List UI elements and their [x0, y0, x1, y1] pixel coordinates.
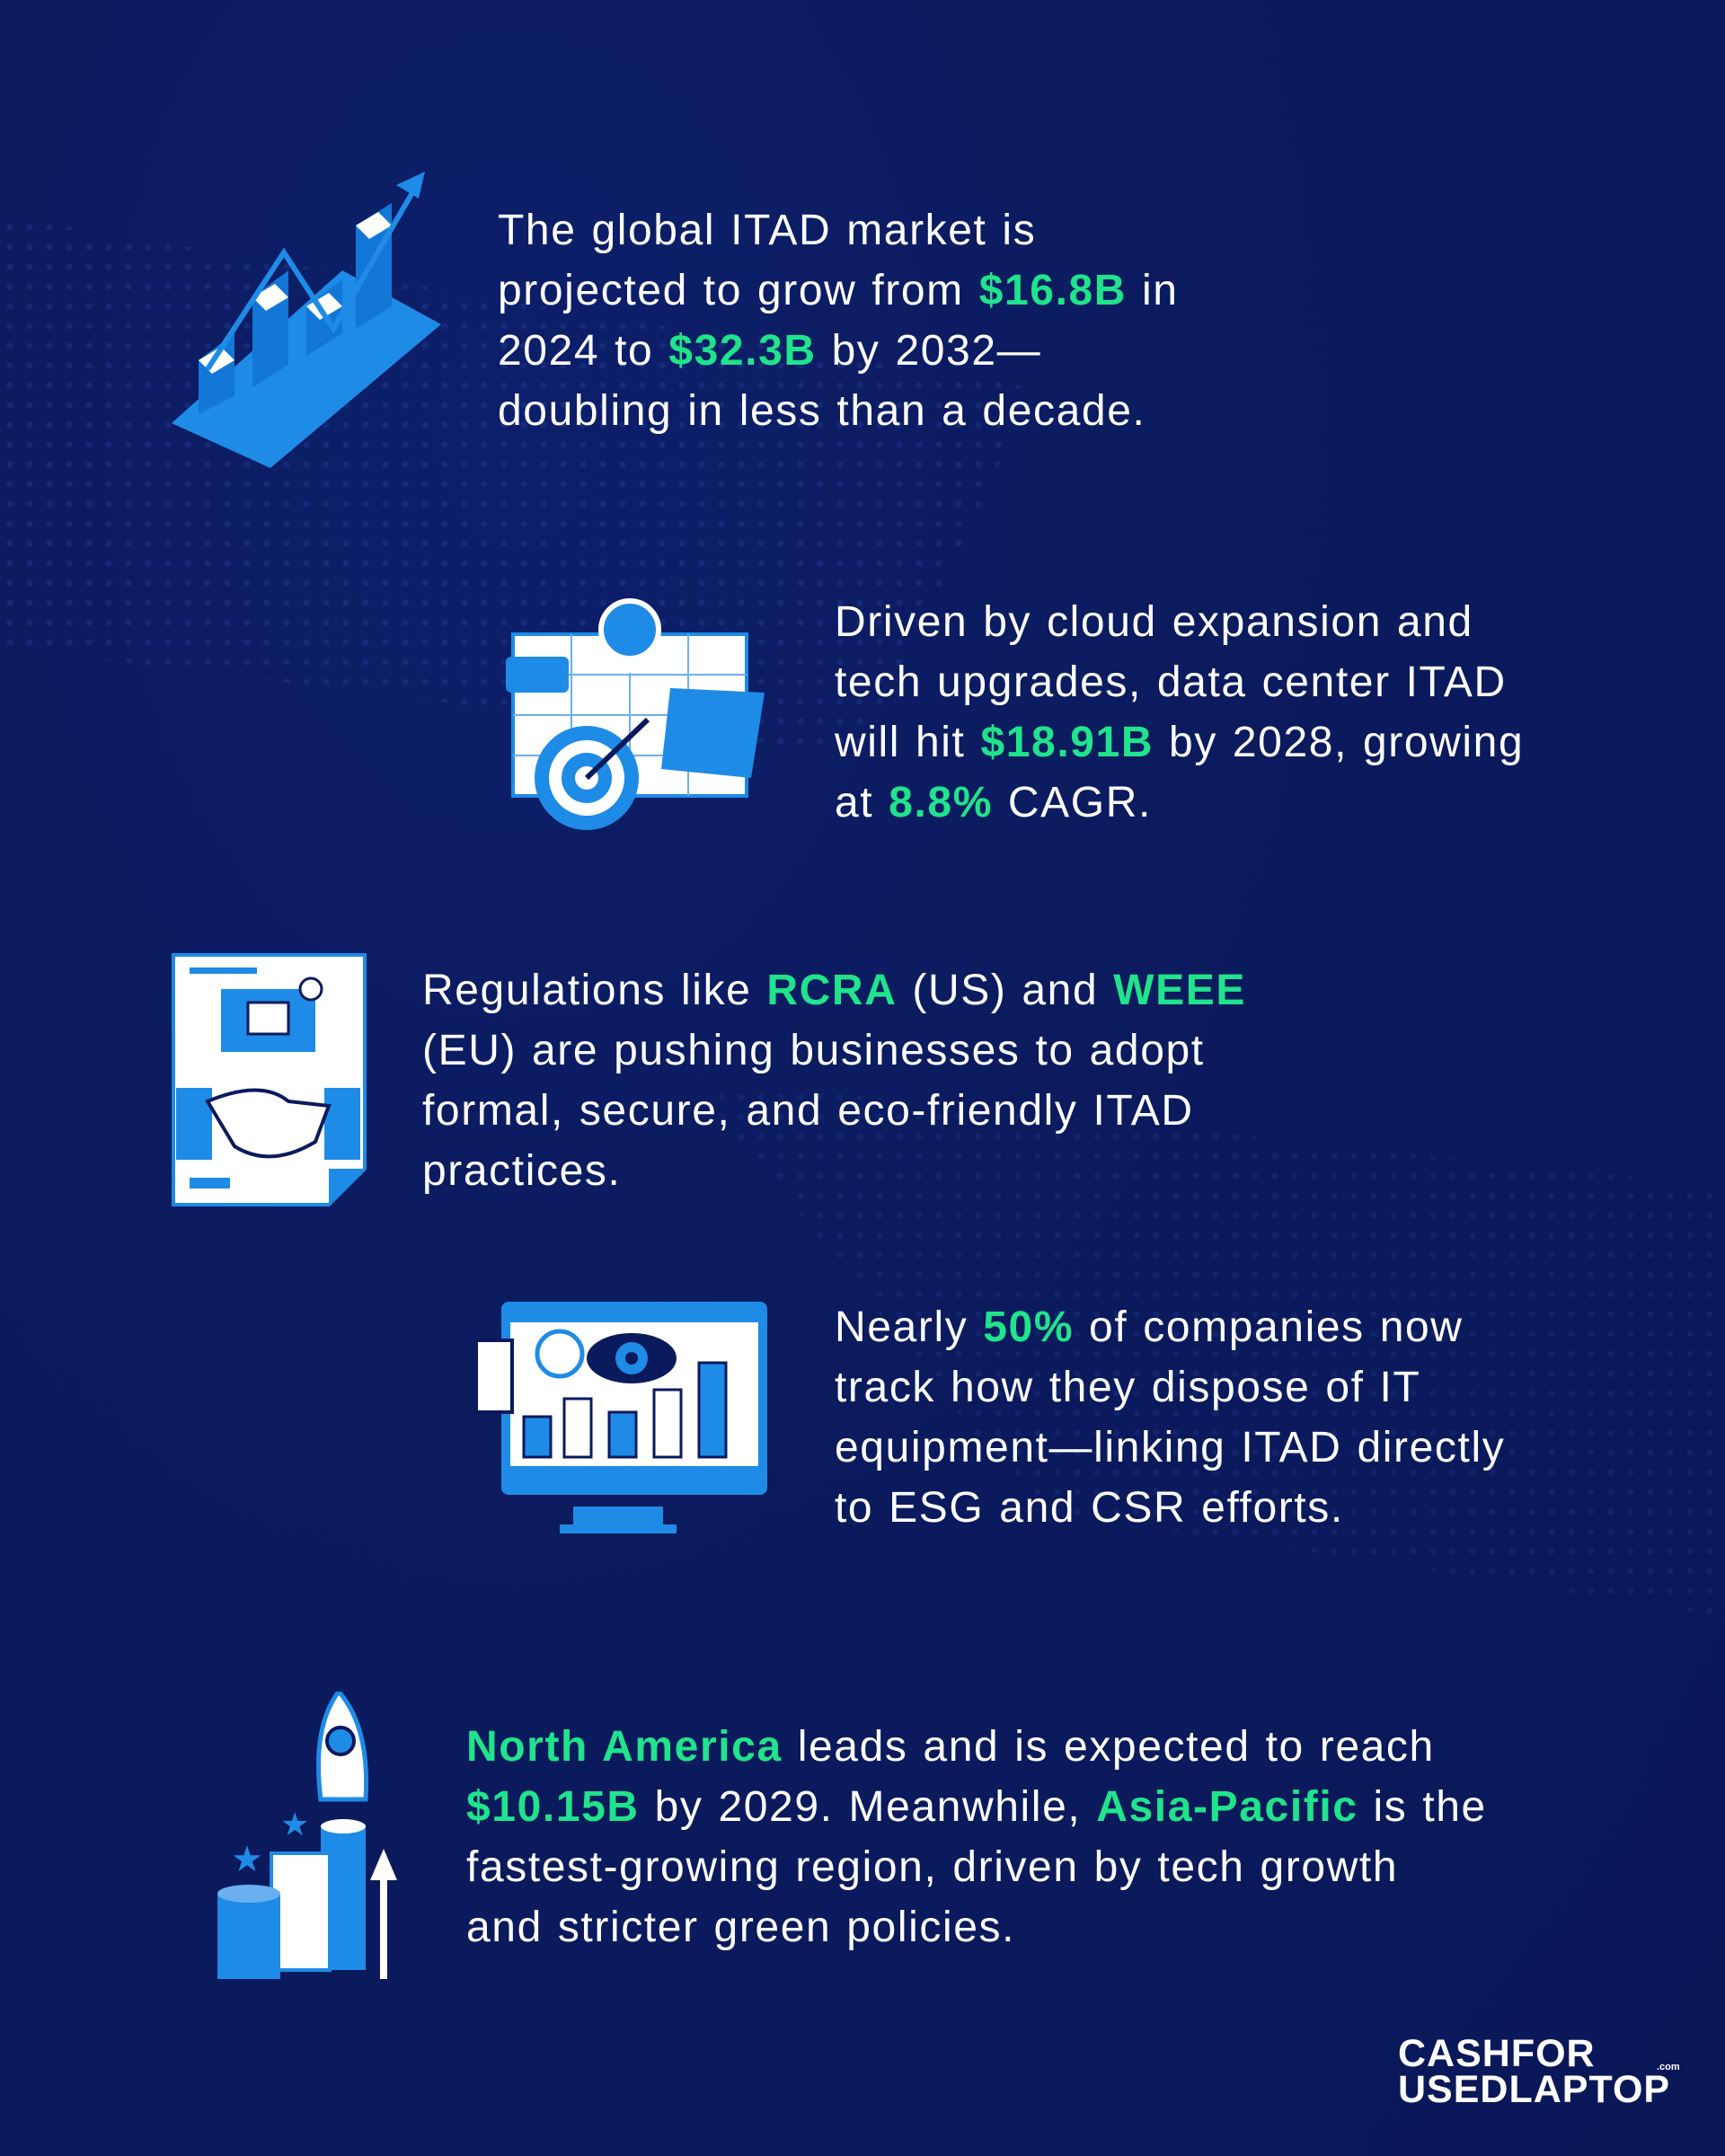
icon: monitor analytics	[478, 1302, 767, 1533]
text block 3: Regulations like RCRA (US) and WEEE	[422, 967, 1246, 1014]
text block 4	[835, 1303, 1505, 1532]
text block 4: equipment—linking ITAD directly	[835, 1424, 1505, 1471]
icon: rocket with cylinders	[217, 1692, 397, 1979]
text block 2: tech upgrades, data center ITAD	[835, 658, 1507, 706]
text block 2: at 8.8% CAGR.	[835, 779, 1152, 826]
text block 1: 2024 to $32.3B by 2032—	[498, 327, 1041, 375]
text block 5: North America leads and is expected to reach	[466, 1723, 1435, 1771]
text block 4: track how they dispose of IT	[835, 1364, 1420, 1411]
text block 1: doubling in less than a decade.	[498, 387, 1146, 435]
logo: .com	[1657, 2062, 1680, 2072]
logo: USEDLAPTOP	[1398, 2068, 1670, 2111]
text block 4: Nearly 50% of companies now	[835, 1303, 1464, 1351]
text block 1: The global ITAD market is	[498, 207, 1036, 254]
text block 5	[466, 1723, 1487, 1951]
text block 5: $10.15B by 2029. Meanwhile, Asia-Pacific is the	[466, 1783, 1487, 1831]
logo: CASHFOR	[1398, 2032, 1596, 2075]
text block 3: practices.	[422, 1147, 621, 1195]
logo	[1398, 2032, 1680, 2111]
icon: target planning board	[506, 598, 765, 830]
icon: handshake document	[172, 953, 367, 1206]
text block 2: will hit $18.91B by 2028, growing	[835, 719, 1524, 766]
icon: growth bar chart	[172, 172, 441, 468]
text block 3	[422, 967, 1246, 1195]
text block 5: fastest-growing region, driven by tech growth	[466, 1843, 1398, 1891]
text block 3: (EU) are pushing businesses to adopt	[422, 1027, 1205, 1074]
text block 3: formal, secure, and eco-friendly ITAD	[422, 1087, 1194, 1135]
icon: rocket with cylinders: ★	[231, 1840, 263, 1879]
text block 2	[834, 598, 1524, 826]
text block 2: Driven by cloud expansion and	[835, 598, 1473, 646]
text block 1	[498, 207, 1179, 435]
icon: rocket with cylinders: ★	[280, 1806, 309, 1842]
text block 1: projected to grow from $16.8B in	[498, 267, 1179, 314]
text block 5: and stricter green policies.	[466, 1904, 1015, 1951]
text block 4: to ESG and CSR efforts.	[835, 1484, 1344, 1532]
